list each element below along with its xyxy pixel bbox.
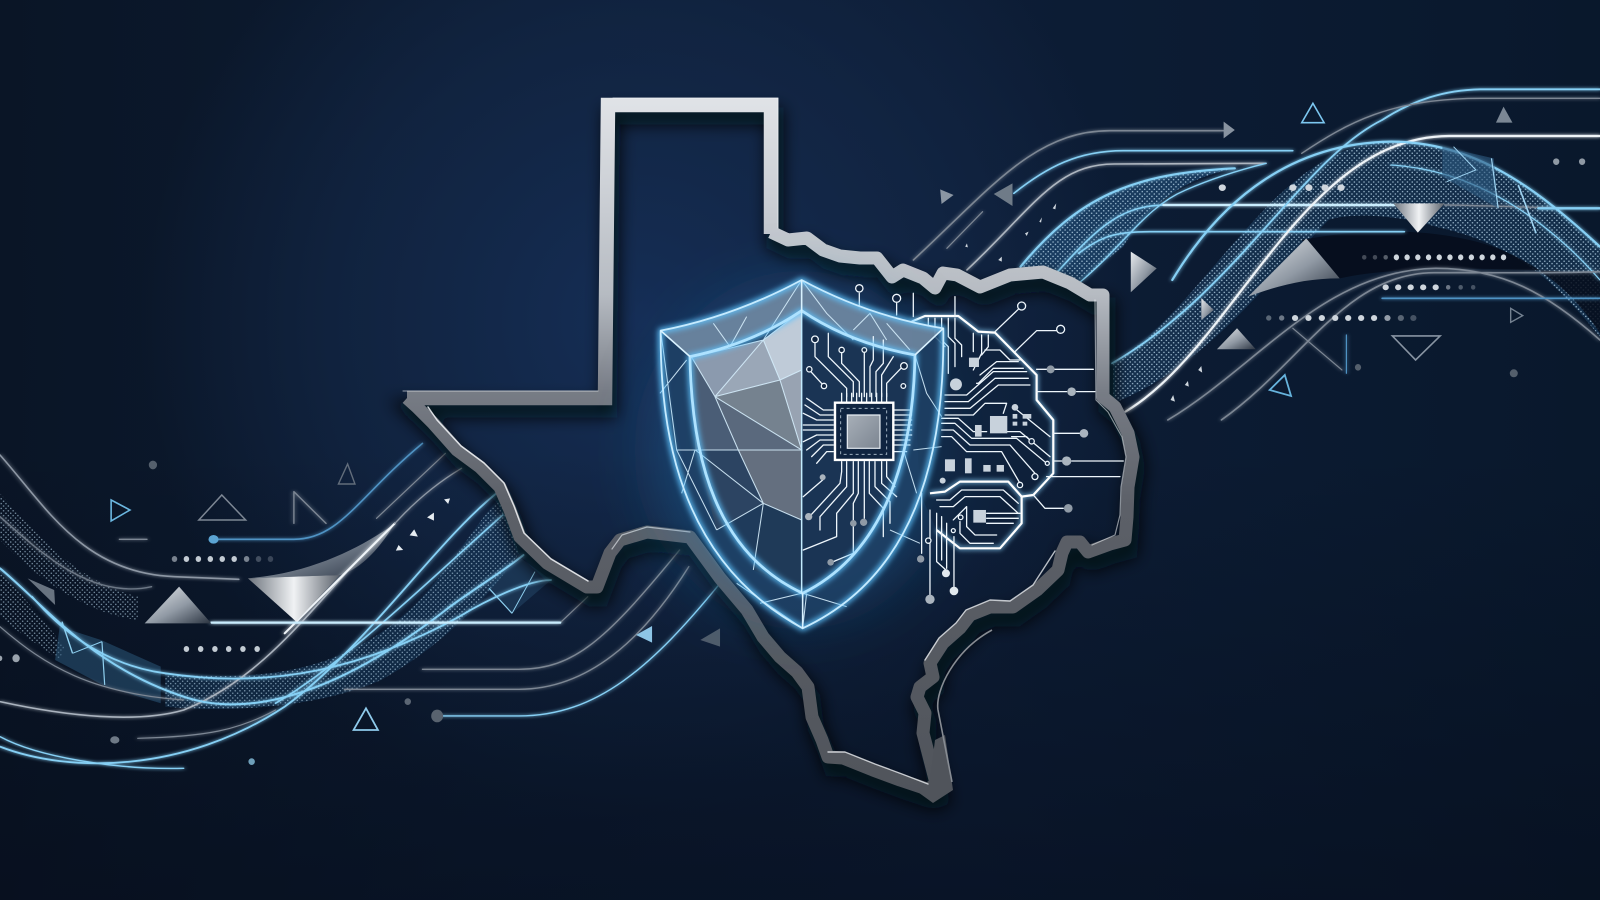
facets: left ribbon	[55, 557, 551, 703]
shield right circuit traces	[803, 333, 912, 562]
ribbon: dotted far left wave	[0, 493, 138, 620]
silver swoosh	[248, 523, 395, 578]
barrier island line	[938, 630, 992, 782]
shield edges	[661, 280, 943, 628]
curves: stream lines	[913, 89, 1600, 420]
brain traces	[859, 293, 1123, 595]
dots: left rows	[0, 461, 443, 765]
shield	[660, 280, 943, 628]
brain fill	[912, 316, 1053, 548]
dark band under silver triangle	[1302, 231, 1600, 333]
shield rim top light	[661, 280, 943, 357]
facets: right ribbon	[1442, 147, 1536, 233]
data streams: left	[0, 443, 720, 768]
right half panel	[802, 311, 915, 593]
shield body	[661, 280, 943, 628]
left half facets	[690, 311, 803, 593]
metal highlights	[403, 98, 1126, 784]
triangles: left	[28, 464, 720, 730]
data streams: right	[913, 89, 1600, 420]
circuit brain	[856, 285, 1123, 604]
southern tip	[915, 735, 953, 803]
curves: stream lines	[0, 443, 720, 768]
brain components	[856, 285, 1088, 604]
shield circuit pads	[805, 336, 907, 566]
metal stroke: coast and borders	[407, 232, 1133, 790]
brain outline	[912, 316, 1053, 548]
shadow	[411, 116, 1137, 801]
glow behind shield and brain	[655, 290, 945, 610]
facet lines	[660, 280, 942, 628]
dots: right rows	[965, 158, 1585, 402]
shield edges glow	[661, 280, 943, 628]
triangles: right	[940, 103, 1523, 396]
ribbon: dotted right wave	[1113, 142, 1600, 403]
shield with circuit brain	[660, 280, 1123, 628]
Texas outline: metallic frame	[403, 98, 1137, 803]
metal stroke: panhandle	[407, 105, 771, 398]
ribbon: dotted upper wave	[1021, 168, 1235, 283]
ribbon: dotted left wave	[165, 497, 519, 709]
chip	[835, 403, 893, 460]
